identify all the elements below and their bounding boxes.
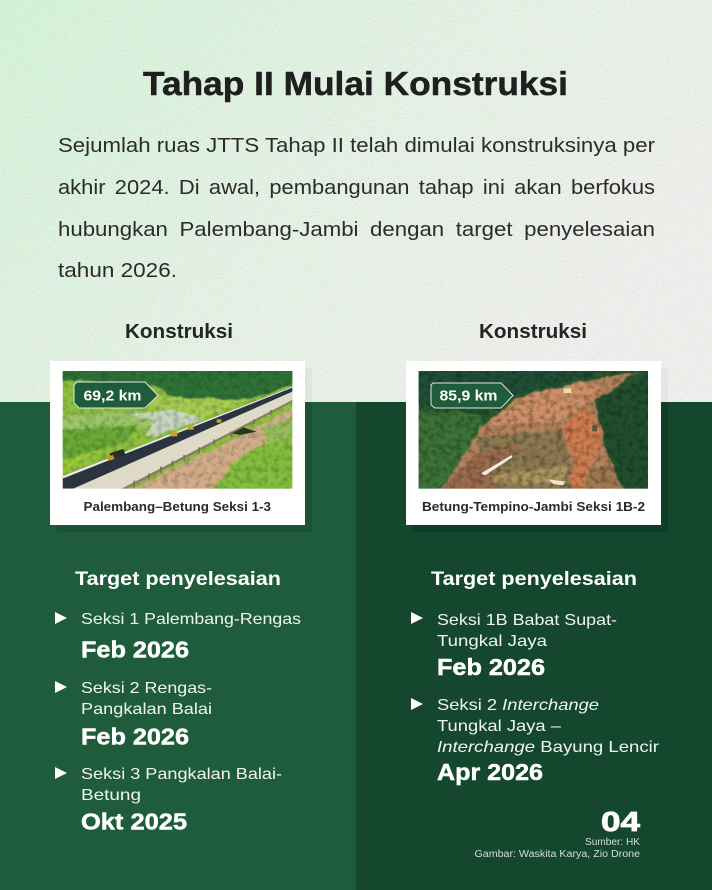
- item: seksi 2: Pangkalan Balai: [81, 701, 212, 718]
- caption: left photo: Palembang–Betung Seksi 1-3: [84, 500, 271, 514]
- item: seksi 3: Seksi 3 Pangkalan Balai-: [81, 766, 282, 783]
- label: 69,2 km distance tag: 69,2 km: [84, 388, 142, 404]
- heading: left construction: Konstruksi: [125, 321, 233, 343]
- item: seksi 2: Feb 2026: [81, 724, 189, 750]
- intro paragraph: [58, 134, 655, 282]
- item: seksi 2: Seksi 2 Rengas-: [81, 680, 212, 697]
- item: seksi 1: Seksi 1 Palembang-Rengas: [81, 611, 301, 628]
- item: seksi 1: Feb 2026: [81, 636, 189, 662]
- item: seksi 2 interchange: Interchange Bayung Lencir: [437, 739, 660, 756]
- item: seksi 3: Betung: [81, 787, 141, 804]
- label: 69,2 km distance tag: [74, 382, 158, 408]
- item: seksi 2 interchange: Apr 2026: [437, 759, 543, 785]
- intro paragraph: Sejumlah ruas JTTS Tahap II telah dimulai konstruksinya per: [58, 134, 655, 157]
- item: seksi 2: [55, 680, 212, 750]
- photo: road bridge over green wetland: [62, 371, 292, 489]
- source credits: Gambar: Waskita Karya, Zio Drone: [474, 849, 640, 860]
- item: seksi 1B: Feb 2026: [437, 654, 545, 680]
- item: seksi 1B: [411, 612, 617, 680]
- page number: 04: [601, 806, 641, 837]
- photo: earthworks through palm forest: [418, 371, 648, 489]
- title: Tahap II Mulai Konstruksi: [143, 65, 568, 102]
- item: seksi 1B: Seksi 1B Babat Supat-: [437, 612, 617, 629]
- item: seksi 2 interchange: [411, 697, 660, 785]
- item: seksi 1B: Tungkal Jaya: [437, 633, 547, 650]
- list: right targets: [411, 612, 660, 785]
- source credits: Sumber: HK: [585, 837, 640, 848]
- label: 85,9 km distance tag: 85,9 km: [440, 388, 498, 404]
- heading: left target: Target penyelesaian: [75, 568, 281, 590]
- label: 85,9 km distance tag: [431, 383, 513, 408]
- panel: right dark green column: [356, 402, 712, 890]
- caption: right photo: Betung-Tempino-Jambi Seksi 1B-2: [422, 500, 645, 514]
- heading: right target: Target penyelesaian: [431, 568, 637, 590]
- intro paragraph: tahun 2026.: [58, 259, 177, 282]
- panel: left green column: [0, 402, 356, 890]
- item: seksi 3: Okt 2025: [81, 808, 187, 834]
- source credits: [474, 837, 640, 860]
- panel: right photo card: [406, 361, 668, 532]
- panel: left photo card: [50, 361, 312, 532]
- background: textured mint top: [0, 0, 712, 403]
- intro paragraph: akhir 2024. Di awal, pembangunan tahap ini akan berfokus: [58, 176, 655, 199]
- list: left targets: [55, 611, 301, 834]
- item: seksi 2 interchange: Tungkal Jaya –: [437, 718, 561, 735]
- item: seksi 3: [55, 766, 282, 834]
- item: seksi 1: [55, 611, 301, 662]
- intro paragraph: hubungkan Palembang-Jambi dengan target penyelesaian: [58, 218, 655, 241]
- heading: right construction: Konstruksi: [479, 321, 587, 343]
- item: seksi 2 interchange: Seksi 2 Interchange: [437, 697, 599, 714]
